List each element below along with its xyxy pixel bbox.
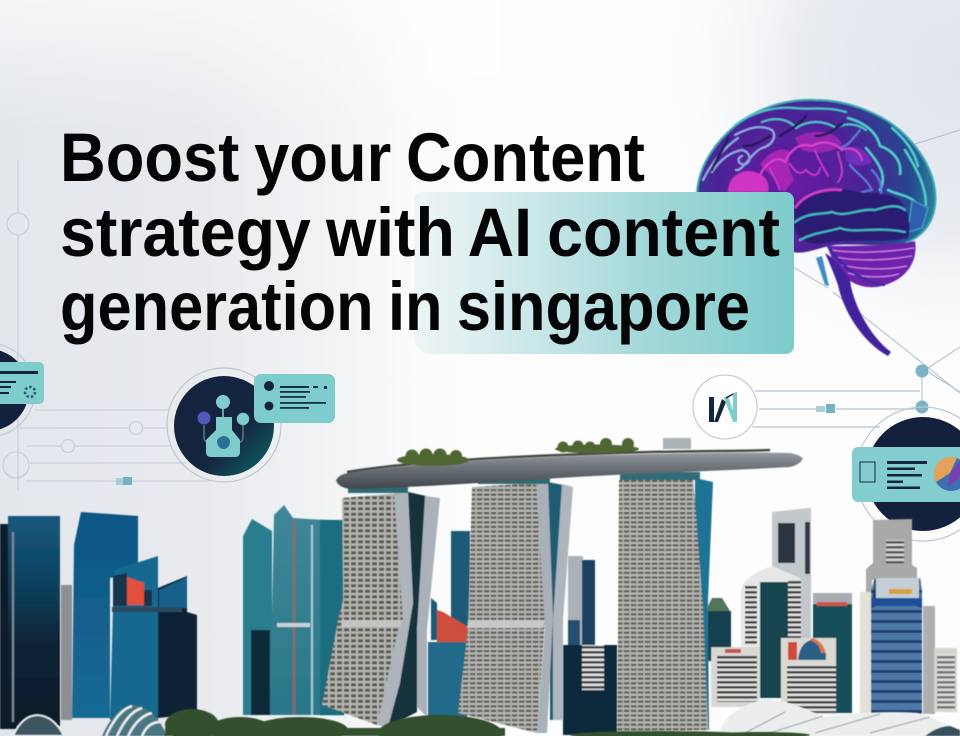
icon: W logo badge	[693, 375, 757, 439]
network lines left	[3, 160, 210, 490]
icon: workflow circle	[167, 368, 335, 482]
brain stem	[825, 253, 891, 356]
skyline right cluster	[711, 508, 957, 714]
pie chart	[934, 457, 960, 491]
flower dome roof	[718, 699, 960, 736]
sky deck	[336, 453, 803, 489]
network nodes right	[816, 364, 928, 414]
gyri highlights	[703, 108, 928, 232]
title: Boost your Content	[60, 119, 645, 196]
title: generation in singapore	[60, 268, 750, 345]
icon: left partial circle with card	[0, 343, 44, 437]
network lines right	[752, 130, 960, 427]
title	[60, 119, 780, 345]
cerebellum	[827, 241, 916, 287]
tower 1	[322, 492, 440, 727]
skyline left cluster	[0, 505, 344, 729]
foreground trees	[165, 709, 810, 736]
skyline background towers	[320, 520, 731, 735]
tower 3	[617, 472, 713, 732]
Marina Bay Sands towers	[322, 438, 803, 733]
icon: AI brain	[697, 100, 935, 356]
tower 2	[458, 480, 573, 733]
icon: right circle with report card	[852, 407, 960, 541]
connector chip left	[116, 477, 132, 485]
title: strategy with AI content	[60, 194, 780, 271]
card	[254, 374, 335, 423]
gardens by the bay domes	[13, 705, 167, 736]
title highlight panel	[414, 192, 794, 354]
rooftop gardens	[397, 438, 639, 466]
frontal purple folds	[728, 132, 872, 192]
temporal lobe	[795, 188, 910, 244]
